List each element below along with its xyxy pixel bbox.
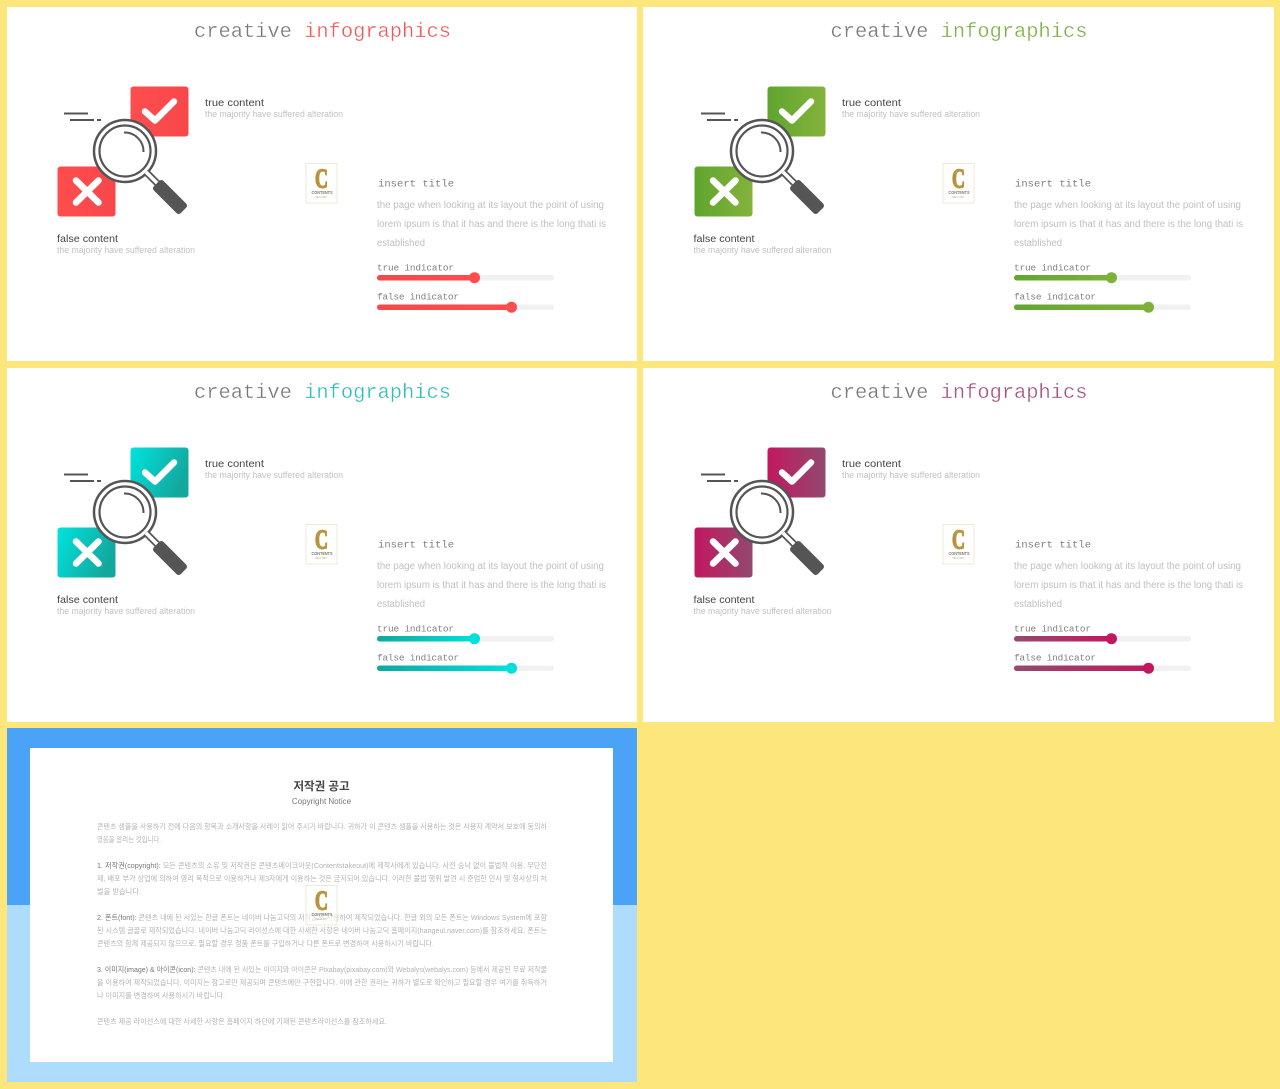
icon: magnifying glass (731, 120, 825, 215)
insert title text block (1014, 540, 1243, 610)
icon: cross square (694, 528, 752, 578)
logo: REAL COPY (316, 195, 328, 199)
title: creative infographics (830, 382, 1087, 405)
false indicator bar: false indicator (377, 652, 459, 664)
section 3: image and icon (97, 964, 547, 1000)
false indicator bar: false indicator (1014, 292, 1096, 302)
true content label: the majority have suffered alteration (205, 470, 343, 480)
logo: CONTENTS (312, 551, 332, 556)
logo: C (952, 524, 965, 554)
section 3: image and icon: 을 이용하여 제작되었습니다. 이미지는 참고로만 제공되며 콘텐츠에만 구현합니다. 이에 관한 권리는 귀하가 별도로 확인하고 필요할 경우 여기를 취득하거 (97, 977, 547, 987)
false content label (694, 594, 832, 616)
intro paragraph: 였음을 알리는 것입니다. (97, 834, 161, 844)
logo: REAL COPY (316, 917, 328, 921)
icon: speed lines (701, 474, 738, 481)
insert title text block: insert title (1015, 178, 1091, 190)
insert title text block: established (1014, 238, 1062, 249)
false content label: false content (694, 233, 755, 245)
false content label: false content (694, 594, 755, 606)
true indicator bar (1014, 624, 1191, 644)
true content label: true content (205, 97, 264, 109)
heading: copyright notice: 저작권 공고 (293, 779, 350, 793)
true content label: the majority have suffered alteration (205, 109, 343, 119)
icon: magnifying glass (94, 481, 188, 576)
icon: check square (130, 448, 188, 498)
icon: check square (768, 86, 826, 136)
true content label: true content (205, 458, 264, 470)
intro paragraph: 콘텐츠 샘플을 사용하기 전에 다음의 항목과 소개사항을 사례이 읽어 주시기 바랍니다. 귀하가 이 콘텐츠 샘플을 사용하는 것은 사용자 계약서 보호에 동의하 (97, 821, 547, 831)
heading: copyright notice: Copyright Notice (292, 797, 352, 806)
true indicator bar: true indicator (377, 624, 454, 634)
false content label: false content (57, 594, 118, 606)
icon: speed lines (64, 114, 101, 120)
insert title text block: insert title (1015, 540, 1091, 552)
insert title text block: the page when looking at its layout the point of using (377, 561, 604, 572)
false indicator bar (1014, 292, 1191, 313)
insert title text block: insert title (378, 178, 454, 190)
true indicator bar: true indicator (1014, 262, 1091, 274)
logo: CONTENTS (948, 551, 970, 556)
section 2: font: 2. 폰트(font): 콘텐츠 내에 된 서있는 한글 폰트는 네이버 나눔고딕의 저작물로 사용하여 제작되었습니다. 한글 외의 모든 폰트는 Windows System에 포함 (97, 912, 547, 922)
panel: magenta infographic (643, 368, 1274, 722)
insert title text block: the page when looking at its layout the point of using (377, 200, 604, 211)
closing note: 콘텐츠 제공 라이선스에 대한 사세한 사항은 홈페이지 하단에 기재된 콘텐츠라이선스를 참조하세요. (97, 1016, 387, 1026)
section 3: image and icon: 나 이미지를 변경하여 사용하시기 바랍니다. (97, 990, 225, 1000)
title: creative infographics (194, 382, 451, 405)
icon: magnifying glass (94, 120, 188, 215)
true content label (205, 97, 343, 119)
false content label: the majority have suffered alteration (694, 245, 832, 255)
false indicator bar (1014, 652, 1191, 674)
section 2: font (97, 912, 547, 948)
section 2: font: 된 시스템 글꼴로 제작되었습니다. 네이버 나눔고딕 라이선스에 대한 사세한 사항은 네이버 나눔고딕 홈페이지(hangeul.naver.com)를 참조하세요. 폰트는 (97, 925, 547, 935)
true content label (205, 458, 343, 480)
logo (943, 164, 974, 203)
false indicator bar (377, 292, 554, 313)
insert title text block: lorem ipsum is that it has and there is the long thati is (1014, 219, 1243, 230)
true content label: the majority have suffered alteration (842, 470, 980, 480)
panel: red infographic (7, 7, 637, 361)
insert title text block: lorem ipsum is that it has and there is the long thati is (1014, 580, 1243, 591)
heading: copyright notice (292, 779, 352, 806)
section 1: copyright (97, 860, 547, 896)
logo: C (315, 164, 328, 194)
insert title text block: lorem ipsum is that it has and there is the long thati is (377, 580, 606, 591)
panel: copyright notice (7, 728, 637, 1082)
true content label: the majority have suffered alteration (842, 109, 980, 119)
icon: speed lines (64, 474, 101, 481)
intro paragraph (97, 821, 547, 844)
logo: C (315, 886, 328, 916)
false content label: the majority have suffered alteration (57, 606, 195, 616)
false content label: the majority have suffered alteration (57, 245, 195, 255)
false indicator bar: false indicator (1014, 652, 1096, 664)
false content label (57, 594, 195, 616)
logo: CONTENTS (948, 190, 970, 195)
section 1: copyright: 재, 배포 부가 상업에 의하여 영리 목적으로 이용하거나 제3자에게 이용하는 것은 금지되어 있습니다. 이러한 불법 행위 발견 시 준엄한 민사 및 형사상의 처 (97, 873, 547, 883)
icon: cross square (694, 166, 752, 216)
insert title text block (1014, 178, 1243, 249)
panel: green infographic (643, 7, 1274, 361)
false content label (694, 233, 832, 255)
logo: REAL COPY (952, 556, 965, 560)
logo: REAL COPY (316, 556, 328, 560)
true indicator bar (377, 624, 554, 644)
logo (306, 164, 337, 203)
icon: check square (130, 86, 188, 136)
true indicator bar (1014, 262, 1191, 283)
true indicator bar (377, 262, 554, 283)
insert title text block: the page when looking at its layout the point of using (1014, 561, 1241, 572)
insert title text block: established (377, 599, 425, 610)
icon: speed lines (701, 114, 738, 120)
true content label: true content (842, 97, 901, 109)
true indicator bar: true indicator (1014, 624, 1091, 634)
icon: cross square (58, 528, 116, 578)
title: creative infographics (830, 21, 1087, 44)
logo: C (952, 164, 965, 194)
insert title text block: insert title (378, 540, 454, 552)
insert title text block: established (1014, 599, 1062, 610)
false indicator bar (377, 652, 554, 674)
icon: magnifying glass (731, 481, 825, 576)
section 1: copyright: 벌을 받습니다. (97, 886, 141, 896)
false content label (57, 233, 195, 255)
logo: REAL COPY (952, 195, 965, 199)
icon: cross square (58, 166, 116, 216)
false content label: the majority have suffered alteration (694, 606, 832, 616)
false content label: false content (57, 233, 118, 245)
section 2: font: 콘텐츠의 함께 제공되지 않으므로, 필요할 경우 정품 폰트를 구입하거나 다른 폰트로 변경하여 사용하시기 바랍니다. (97, 938, 434, 948)
true content label: true content (842, 458, 901, 470)
logo (943, 524, 974, 564)
icon: check square (768, 448, 826, 498)
section 1: copyright: 1. 저작권(copyright): 모든 콘텐츠의 소유 및 저작권은 콘텐츠메이크아웃(Contentstakeout)에 제작사에게 있습니다. 사전 승낙 없이 불법적 이용, 무단전 (97, 860, 547, 870)
true indicator bar: true indicator (377, 262, 454, 274)
insert title text block: the page when looking at its layout the point of using (1014, 200, 1241, 211)
insert title text block: lorem ipsum is that it has and there is the long thati is (377, 219, 606, 230)
insert title text block (377, 540, 606, 610)
insert title text block (377, 178, 606, 249)
logo: C (315, 524, 328, 554)
section 3: image and icon: 3. 이미지(image) & 아이콘(icon): 콘텐츠 내에 된 사있는 이미지와 아이콘은 Pixabay(pixabay.com)와 Webalys(webalys.com) 등에서 제공된 무료 저작물 (97, 964, 547, 974)
title: creative infographics (194, 21, 451, 44)
panel: teal infographic (7, 368, 637, 722)
logo: CONTENTS (312, 912, 332, 917)
logo (306, 524, 337, 564)
logo: CONTENTS (312, 190, 332, 195)
true content label (842, 458, 980, 480)
false indicator bar: false indicator (377, 292, 459, 302)
true content label (842, 97, 980, 119)
insert title text block: established (377, 238, 425, 249)
logo (306, 886, 337, 925)
